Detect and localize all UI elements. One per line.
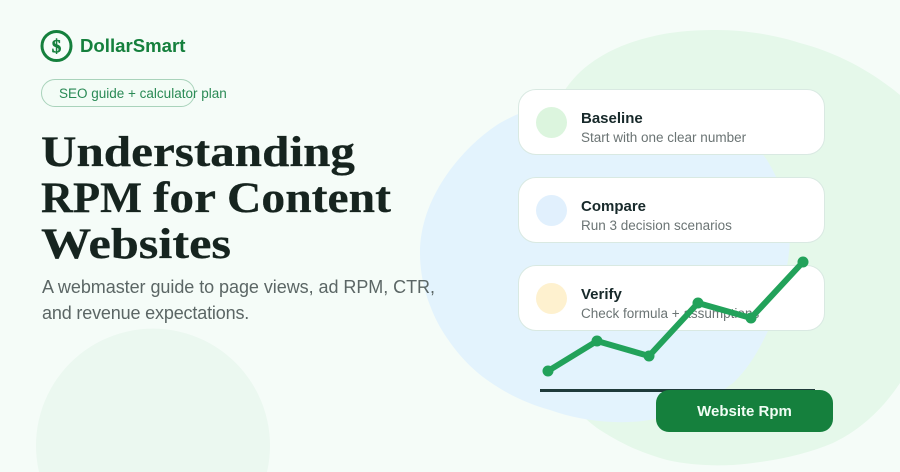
title: for: [153, 175, 216, 222]
subtitle: A webmaster guide to page views, ad RPM, CTR,: [42, 277, 435, 297]
text: Run 3 decision scenarios: [581, 218, 732, 233]
line: [548, 262, 803, 371]
subtitle: [42, 277, 435, 323]
dot: [536, 283, 567, 314]
points: [542, 256, 808, 376]
button: [656, 390, 833, 432]
subtitle: and revenue expectations.: [42, 302, 249, 322]
blob: green: [516, 30, 900, 465]
dot: [536, 107, 567, 138]
tag pill: [41, 79, 195, 107]
icon: dollar coin: [40, 30, 72, 62]
title: Content: [227, 175, 392, 222]
heading: Baseline: [581, 110, 643, 126]
text: Check formula + assumptions: [581, 306, 759, 321]
title: Websites: [41, 221, 231, 268]
heading: Verify: [581, 286, 622, 302]
icon: dollar coin: $: [52, 36, 61, 58]
heading: Compare: [581, 198, 646, 214]
circle: bottom left: [36, 329, 270, 472]
axis: [540, 389, 815, 392]
blob: blue: [420, 94, 790, 422]
dot: [536, 195, 567, 226]
card: compare: [518, 177, 825, 243]
tag text: SEO guide + calculator plan: [59, 86, 227, 101]
title: [41, 129, 392, 268]
card: verify: [518, 265, 825, 331]
card: baseline: [518, 89, 825, 155]
title: Understanding: [41, 129, 356, 176]
title: RPM: [41, 175, 142, 222]
logo: [40, 30, 186, 62]
brand name: DollarSmart: [80, 35, 185, 56]
text: Start with one clear number: [581, 130, 746, 145]
button: Website Rpm: [697, 403, 792, 420]
